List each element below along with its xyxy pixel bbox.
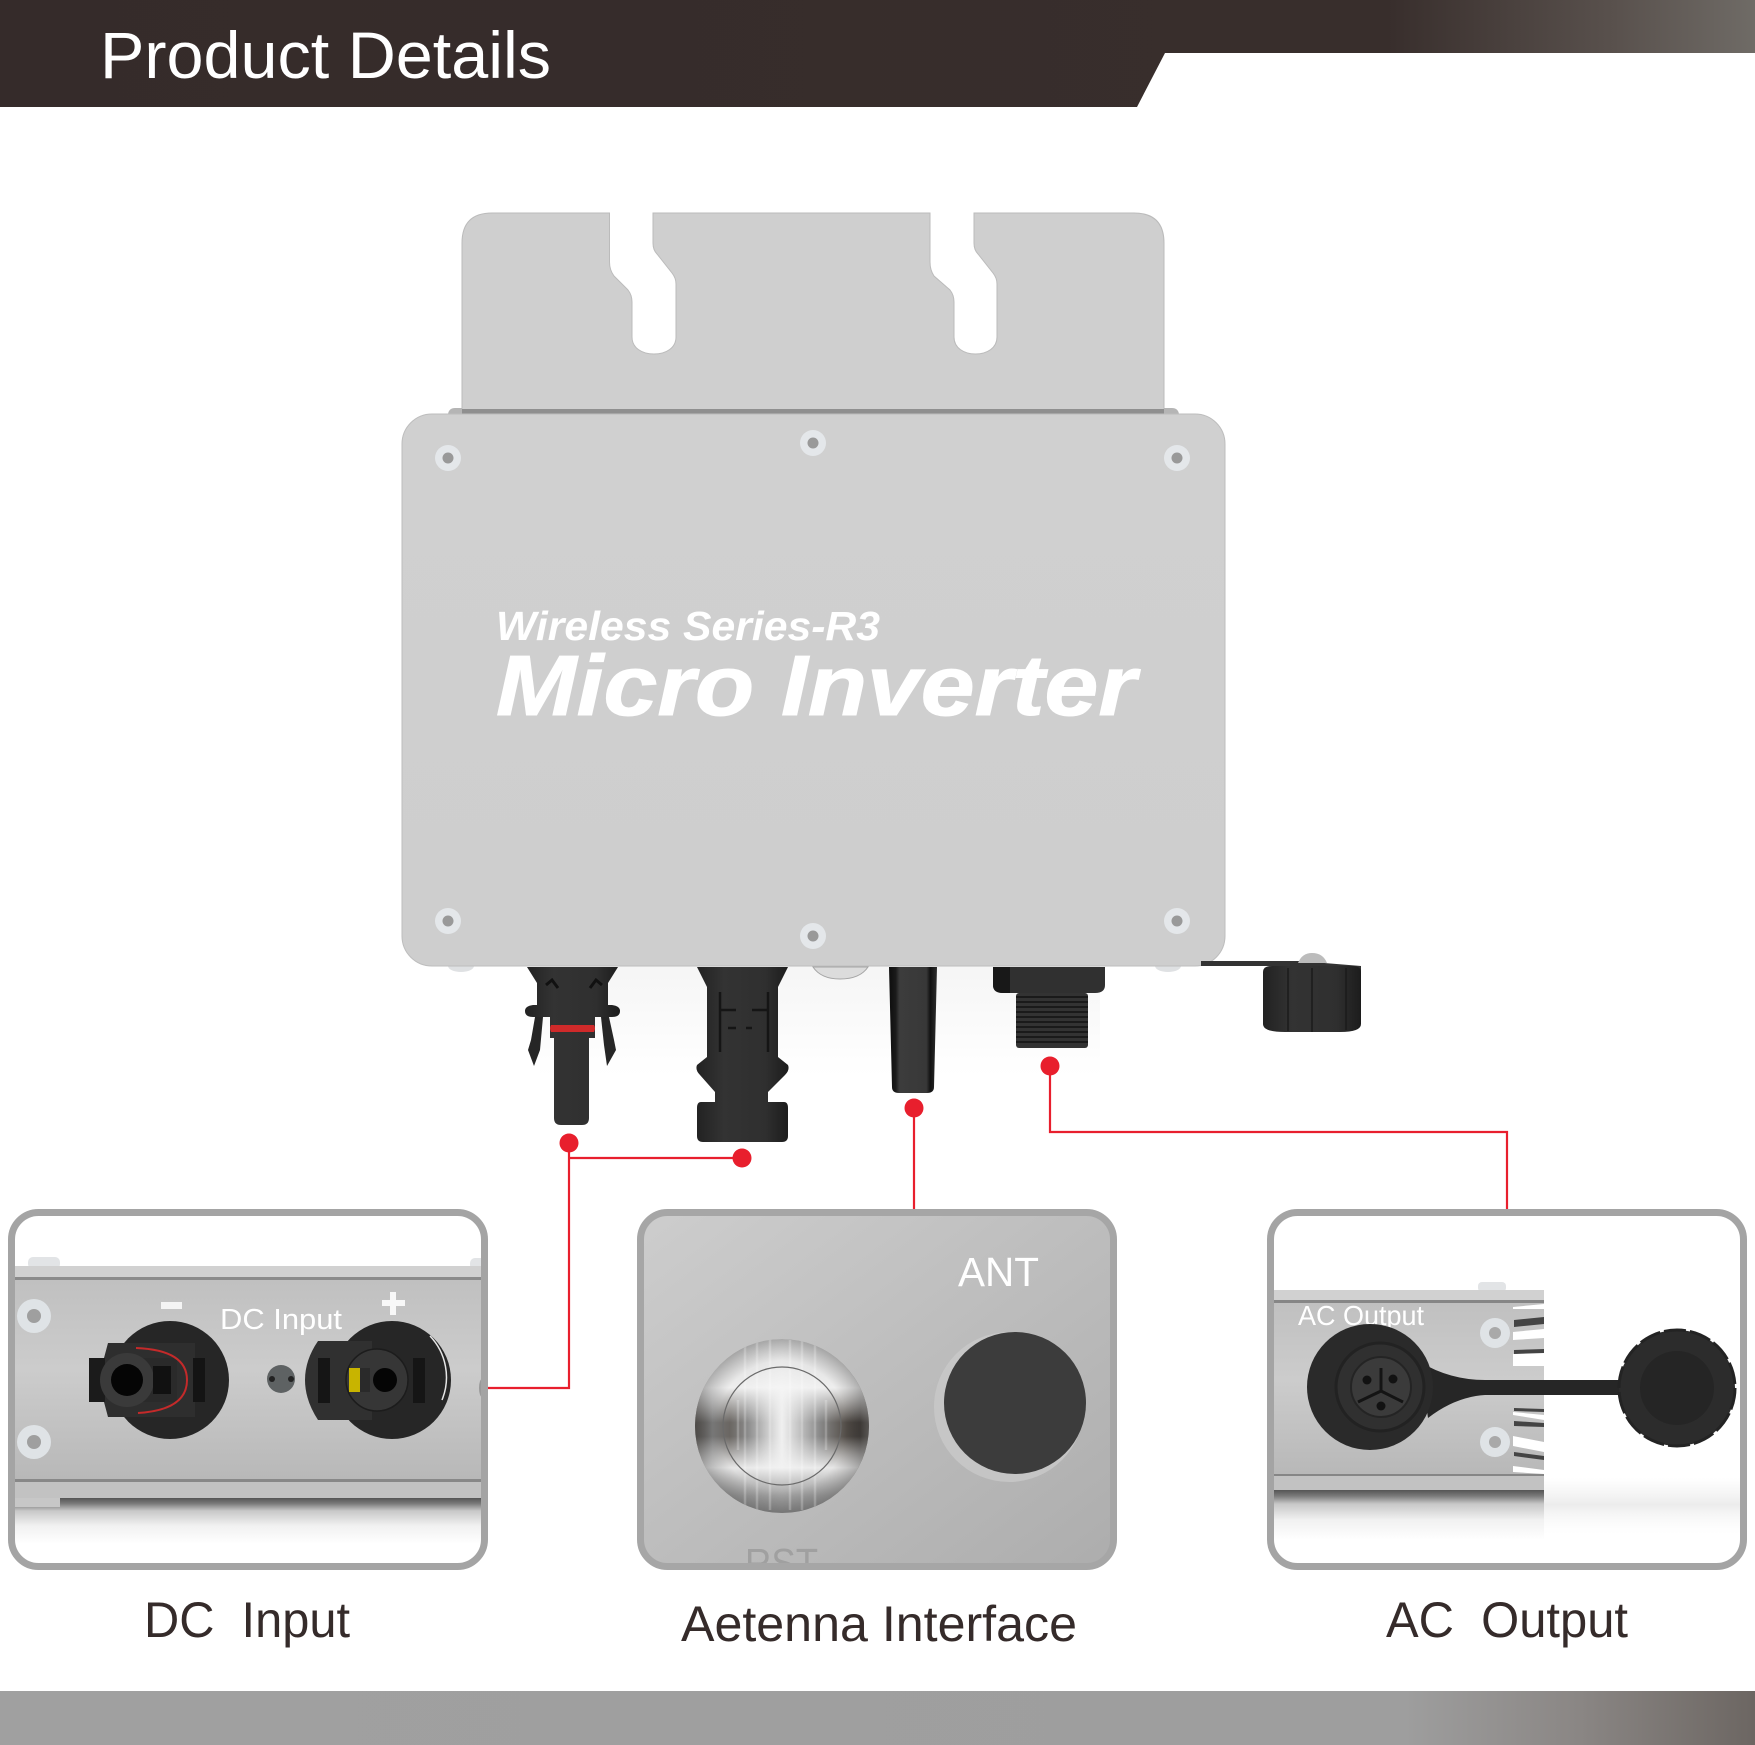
minus sign — [161, 1302, 182, 1309]
title: Product Details — [100, 18, 551, 92]
DC connector female — [696, 967, 789, 1142]
panel: antenna interface — [640, 1212, 1114, 1586]
header banner — [0, 0, 1755, 107]
reset label: RST — [745, 1540, 818, 1586]
AC socket — [1307, 1324, 1433, 1450]
antenna socket — [934, 1332, 1086, 1482]
bracket hinge line — [448, 408, 1179, 414]
plus sign — [382, 1292, 405, 1315]
antenna — [889, 967, 937, 1093]
retaining strap — [1427, 1367, 1620, 1418]
inverter body — [402, 414, 1225, 966]
panel: AC output — [1270, 1212, 1744, 1566]
screws — [435, 430, 1190, 949]
micro inverter product — [402, 213, 1361, 1142]
positive port — [305, 1321, 451, 1439]
screws — [17, 1299, 51, 1459]
faint floor shadow under connectors — [540, 966, 1100, 1076]
model text: Micro Inverter — [496, 639, 1140, 734]
panel label: ANT — [958, 1249, 1039, 1295]
panel label: AC Output — [1298, 1300, 1424, 1331]
panel label: DC Input — [220, 1304, 342, 1336]
series text: Wireless Series-R3 — [496, 603, 880, 649]
mounting bracket — [462, 213, 1164, 411]
panel: DC input — [11, 1212, 486, 1566]
heat-sink fins — [1513, 1304, 1544, 1474]
caption: AC output: AC Output — [1386, 1592, 1628, 1648]
AC connector — [993, 967, 1105, 1048]
AC protective cap — [1201, 953, 1361, 1032]
caption: antenna interface: Aetenna Interface — [681, 1596, 1077, 1652]
leader lines — [487, 1066, 1507, 1388]
negative port — [89, 1321, 229, 1439]
reset dome — [813, 967, 868, 979]
footer bar — [0, 1691, 1755, 1745]
body feet — [448, 960, 1181, 972]
protective cap — [1619, 1330, 1735, 1446]
screws — [1480, 1318, 1510, 1457]
status LED — [267, 1365, 295, 1393]
DC connector male — [525, 967, 620, 1125]
leader dots — [560, 1056, 1060, 1168]
reset button — [695, 1339, 869, 1513]
caption: DC input: DC Input — [144, 1592, 350, 1648]
